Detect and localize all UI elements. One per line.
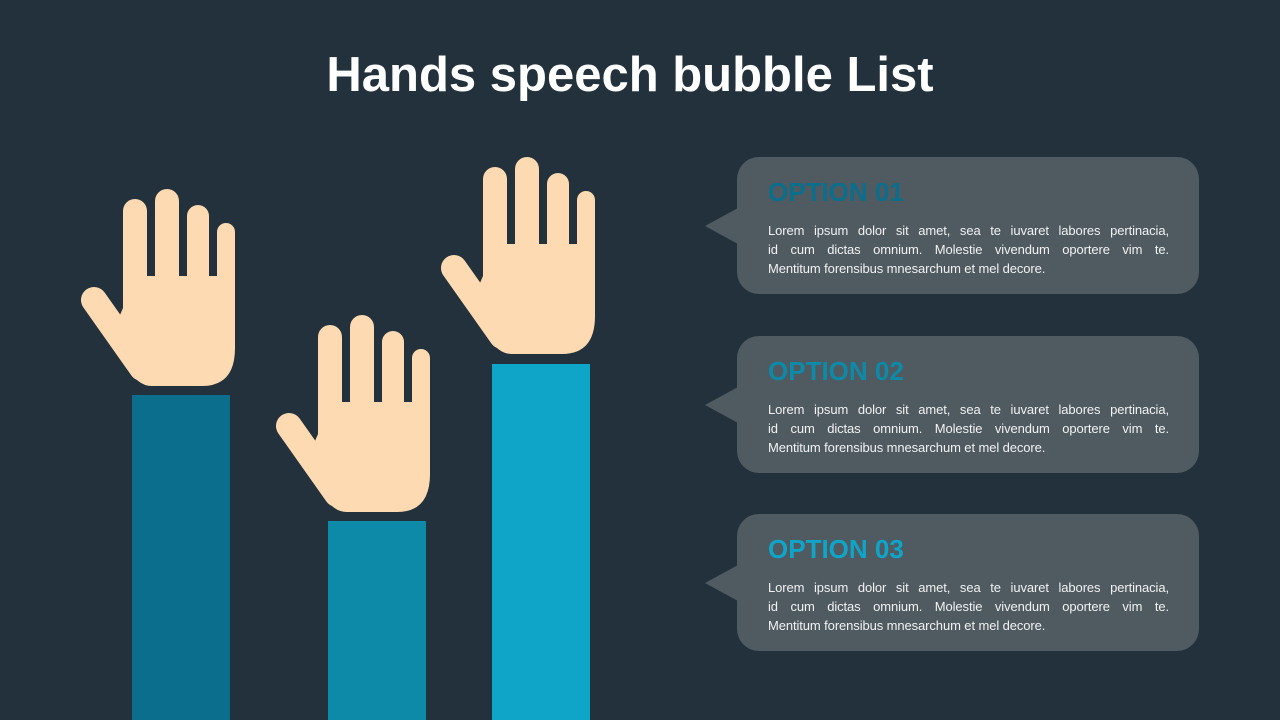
bubble: option 02	[705, 336, 1199, 473]
arm 1	[94, 189, 235, 720]
bubble: option 03: Mentitum forensibus mnesarchum et mel decore.	[768, 618, 1045, 633]
bubble: option 03: id cum dictas omnium. Molestie vivendum oportere vim te.	[768, 599, 1169, 614]
bubble: option 01	[705, 157, 1199, 294]
illustration: raised hands	[81, 157, 595, 720]
bubble: option 01: OPTION 01	[768, 177, 904, 207]
bubble: option 02: Lorem ipsum dolor sit amet, sea te iuvaret labores pertinacia,	[768, 402, 1169, 417]
bubble: option 02: Mentitum forensibus mnesarchum et mel decore.	[768, 440, 1045, 455]
bubble: option 02: OPTION 02	[768, 356, 904, 386]
bubble: option 03: OPTION 03	[768, 534, 904, 564]
bubble: option 01: Mentitum forensibus mnesarchum et mel decore.	[768, 261, 1045, 276]
arm 3	[454, 157, 595, 720]
bubble: option 03	[705, 514, 1199, 651]
bubble: option 01: id cum dictas omnium. Molestie vivendum oportere vim te.	[768, 242, 1169, 257]
title: Hands speech bubble List	[326, 48, 934, 102]
bubble: option 01: Lorem ipsum dolor sit amet, sea te iuvaret labores pertinacia,	[768, 223, 1169, 238]
arm 2	[289, 315, 430, 720]
bubble: option 02: id cum dictas omnium. Molestie vivendum oportere vim te.	[768, 421, 1169, 436]
bubble: option 03: Lorem ipsum dolor sit amet, sea te iuvaret labores pertinacia,	[768, 580, 1169, 595]
